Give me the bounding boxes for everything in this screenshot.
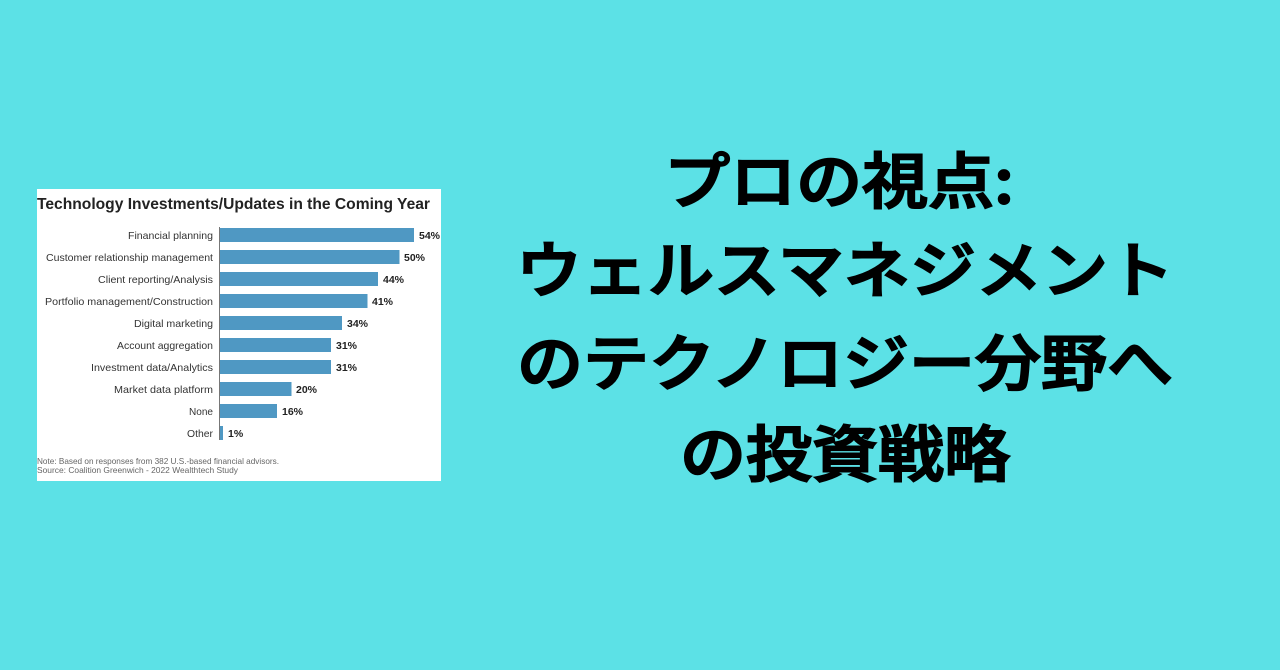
category labels: [45, 230, 213, 440]
bars: [220, 228, 414, 440]
category labels: Financial planning: [128, 230, 213, 242]
value labels: 54%: [419, 230, 441, 242]
category labels: Client reporting/Analysis: [98, 274, 213, 286]
category labels: Investment data/Analytics: [91, 362, 213, 374]
category labels: Market data platform: [114, 384, 213, 396]
footnote: [37, 456, 279, 475]
category labels: Customer relationship management: [46, 252, 213, 264]
category labels: Other: [187, 428, 213, 440]
value labels: 31%: [336, 362, 358, 374]
value labels: 1%: [228, 428, 244, 440]
category labels: Portfolio management/Construction: [45, 296, 213, 308]
title: [516, 133, 1174, 494]
title: のテクノロジー分野へ: [517, 315, 1173, 403]
chart panel: technology investments: [37, 189, 441, 481]
value labels: 34%: [347, 318, 369, 330]
value labels: 16%: [282, 406, 304, 418]
value labels: 20%: [296, 384, 318, 396]
category labels: Digital marketing: [134, 318, 213, 330]
category labels: Account aggregation: [117, 340, 213, 352]
value labels: [228, 230, 441, 440]
title: プロの視点:: [664, 133, 1014, 221]
value labels: 41%: [372, 296, 394, 308]
title: の投資戦略: [680, 406, 1010, 494]
footnote: Note: Based on responses from 382 U.S.-based financial advisors.: [37, 456, 279, 466]
bar chart: [45, 227, 441, 440]
value labels: 31%: [336, 340, 358, 352]
footnote: Source: Coalition Greenwich - 2022 Wealthtech Study: [37, 465, 239, 475]
value labels: 50%: [404, 252, 426, 264]
value labels: 44%: [383, 274, 405, 286]
category labels: None: [189, 406, 213, 418]
chart title: Technology Investments/Updates in the Coming Year: [37, 196, 430, 213]
title: ウェルスマネジメント: [516, 222, 1174, 310]
